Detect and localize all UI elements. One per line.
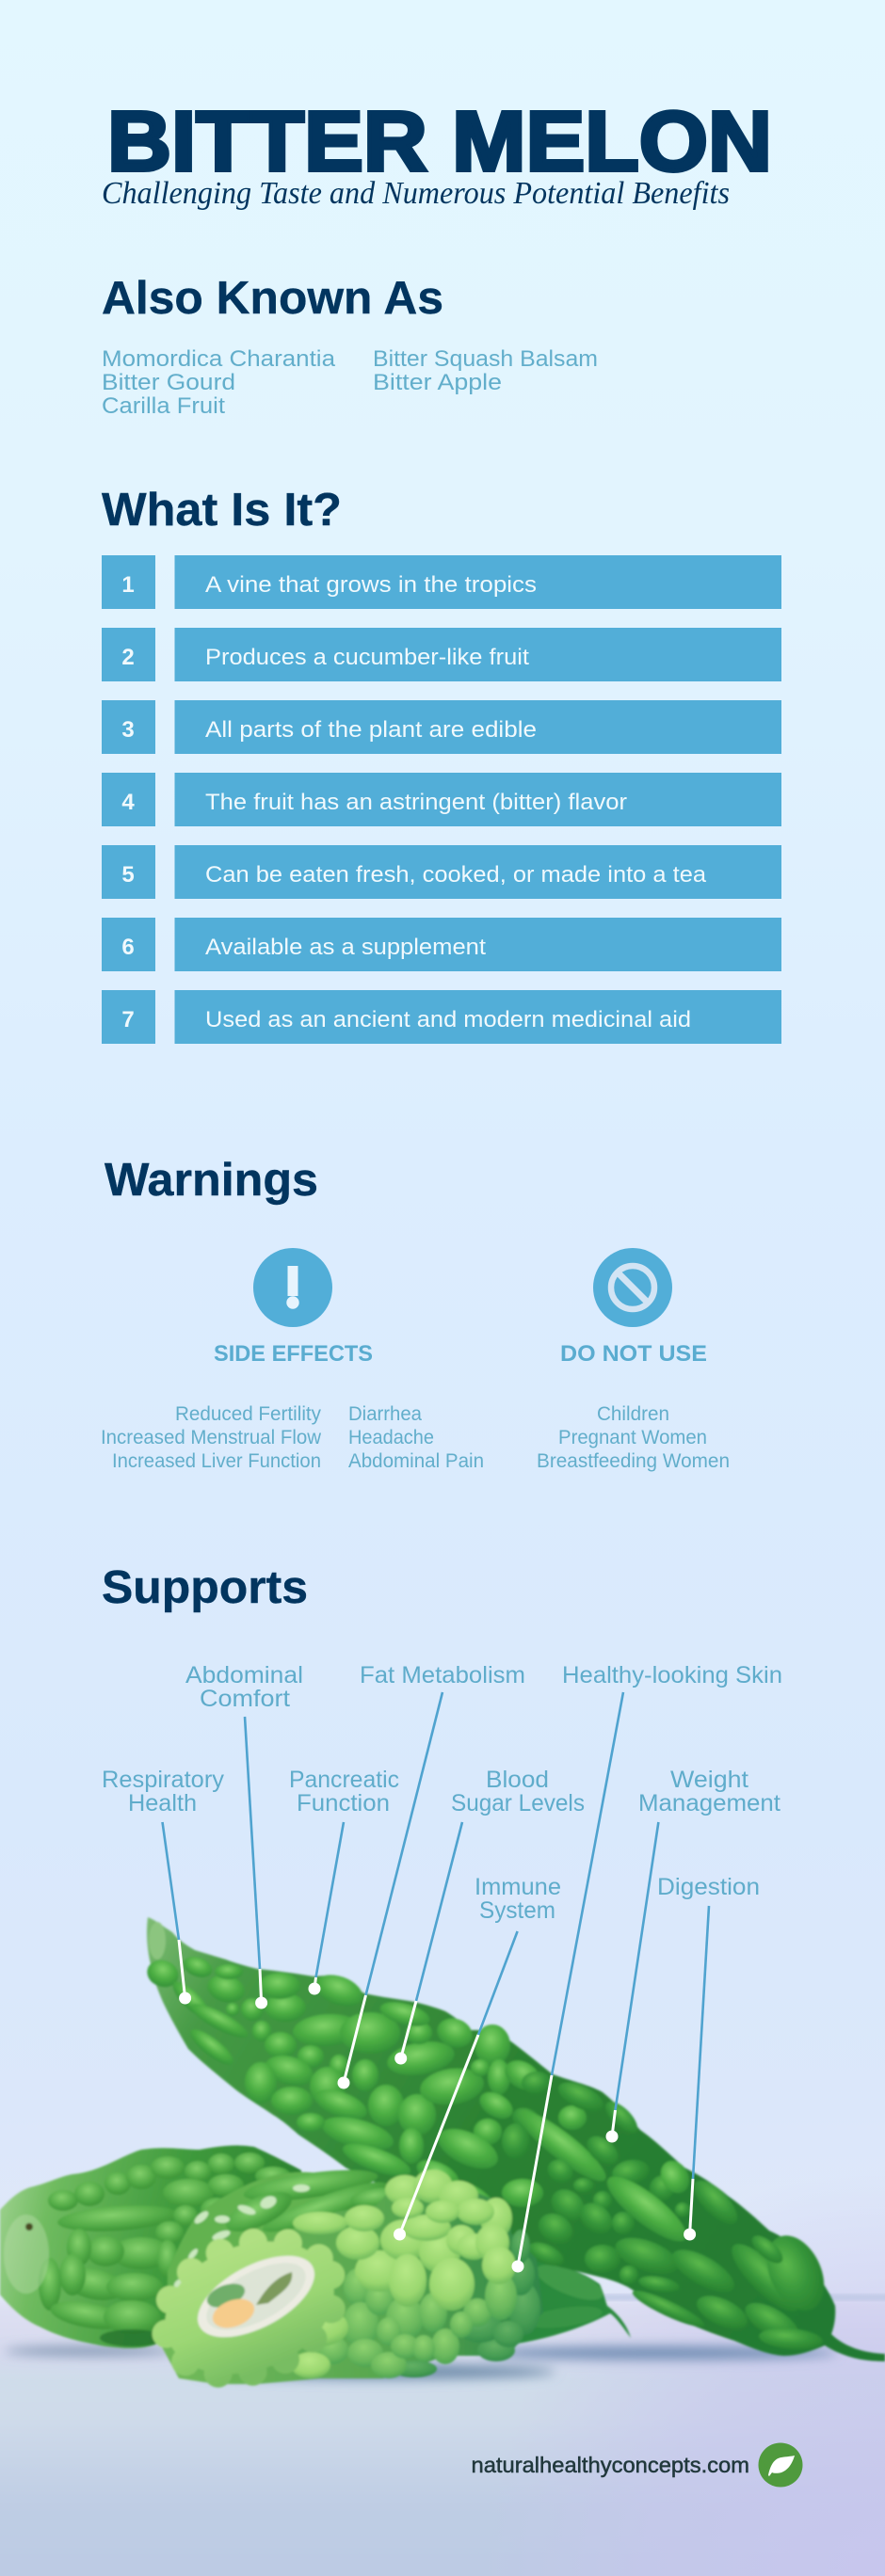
callout: digestion: Digestion	[657, 1874, 760, 1900]
row 2: 2	[121, 645, 135, 670]
callout: blood sugar levels	[394, 1767, 585, 2065]
row 6: 6	[121, 935, 135, 960]
side effects list: Abdominal Pain	[348, 1450, 484, 1472]
title: BITTER MELON	[107, 95, 772, 189]
callout: fat metabolism	[337, 1662, 525, 2089]
row 7	[102, 990, 781, 1044]
row 5: 5	[121, 862, 135, 888]
list of alternative names	[102, 346, 598, 419]
do not use list	[537, 1403, 730, 1472]
callout: digestion	[657, 1874, 760, 2240]
row 6	[102, 918, 781, 971]
row 4: The fruit has an astringent (bitter) flavor	[205, 790, 627, 815]
table surface	[0, 2165, 885, 2576]
mid lobes	[316, 2268, 517, 2378]
side effects list: Headache	[348, 1427, 434, 1448]
callout: healthy-looking skin	[512, 1662, 782, 2272]
side effects heading: SIDE EFFECTS	[214, 1341, 373, 1367]
callout: immune system: Immune	[475, 1874, 561, 1900]
callout: pancreatic function: Pancreatic	[289, 1767, 399, 1793]
footer website: naturalhealthyconcepts.com	[471, 2453, 749, 2477]
list of alternative names: Bitter Apple	[373, 370, 502, 395]
callout: pancreatic function	[289, 1767, 399, 1995]
panel: also known as	[102, 273, 598, 419]
heading: also known as: Also Known As	[102, 273, 443, 324]
callout: fat metabolism: Fat Metabolism	[360, 1662, 525, 1688]
icon: prohibited	[593, 1248, 672, 1327]
list of alternative names: Carilla Fruit	[102, 393, 225, 419]
heading: warnings: Warnings	[105, 1155, 318, 1206]
side effects list	[101, 1403, 484, 1472]
callout: abdominal comfort: Abdominal	[185, 1662, 303, 1688]
row 5	[102, 845, 781, 899]
callout: immune system	[394, 1874, 561, 2240]
melon: left	[0, 2146, 311, 2348]
row 6: Available as a supplement	[205, 935, 486, 960]
slice 1: cut face	[145, 2217, 354, 2398]
row 7: Used as an ancient and modern medicinal aid	[205, 1007, 691, 1032]
callout: blood sugar levels: Sugar Levels	[451, 1790, 585, 1816]
do not use list: Children	[597, 1403, 669, 1425]
side effects list: Diarrhea	[348, 1403, 422, 1425]
icon: exclamation	[253, 1248, 332, 1327]
row 2	[102, 628, 781, 681]
illustration: bitter melons	[0, 1917, 885, 2398]
subtitle: Challenging Taste and Numerous Potential Benefits	[102, 176, 730, 211]
bright lobes	[291, 2169, 516, 2378]
callout: respiratory health: Health	[128, 1790, 197, 1816]
callout: respiratory health: Respiratory	[102, 1767, 225, 1793]
row 3	[102, 700, 781, 754]
callout: abdominal comfort	[185, 1662, 303, 2008]
melon: sliced	[145, 2169, 543, 2398]
row 4: 4	[121, 790, 135, 815]
side effects list: Reduced Fertility	[175, 1403, 321, 1425]
side effects list: Increased Liver Function	[112, 1450, 321, 1472]
icon: leaf logo	[759, 2443, 802, 2487]
do not use heading: DO NOT USE	[560, 1341, 707, 1367]
melon: main	[143, 1917, 885, 2361]
row 3: All parts of the plant are edible	[205, 717, 537, 743]
row 2: Produces a cucumber-like fruit	[205, 645, 529, 670]
list of alternative names: Bitter Squash Balsam	[373, 346, 598, 372]
pith and seed	[185, 2239, 328, 2354]
melon: middle behind slices	[168, 2164, 404, 2301]
row 3: 3	[121, 717, 135, 743]
callout: weight management	[606, 1767, 780, 2142]
row 1	[102, 555, 781, 609]
row 5: Can be eaten fresh, cooked, or made into a tea	[205, 862, 707, 888]
row 7: 7	[121, 1007, 135, 1032]
callout: pancreatic function: Function	[297, 1790, 390, 1816]
panel: warnings	[101, 1155, 730, 1472]
do not use list: Breastfeeding Women	[537, 1450, 730, 1472]
table shadows	[5, 2346, 838, 2379]
callout: blood sugar levels: Blood	[486, 1767, 549, 1793]
callout: abdominal comfort: Comfort	[200, 1686, 290, 1712]
row 4	[102, 773, 781, 826]
row 1: 1	[121, 572, 135, 598]
dark lobes at far end	[392, 2230, 540, 2377]
row 1: A vine that grows in the tropics	[205, 572, 537, 598]
side effects list: Increased Menstrual Flow	[101, 1427, 322, 1448]
do not use list: Pregnant Women	[558, 1427, 707, 1448]
list of alternative names: Momordica Charantia	[102, 346, 336, 372]
callout: weight management: Management	[638, 1790, 780, 1816]
sliced body	[160, 2174, 543, 2384]
heading: what is it: What Is It?	[102, 485, 342, 536]
callout: immune system: System	[479, 1897, 555, 1924]
heading: supports: Supports	[102, 1562, 308, 1613]
blossom end scar	[25, 2223, 33, 2231]
callout: weight management: Weight	[670, 1767, 748, 1793]
callout: healthy-looking skin: Healthy-looking Skin	[562, 1662, 782, 1688]
list of alternative names: Bitter Gourd	[102, 370, 235, 395]
callout: respiratory health	[102, 1767, 225, 2005]
melon: back right end	[518, 2258, 631, 2344]
panel: what is it	[102, 485, 781, 1044]
